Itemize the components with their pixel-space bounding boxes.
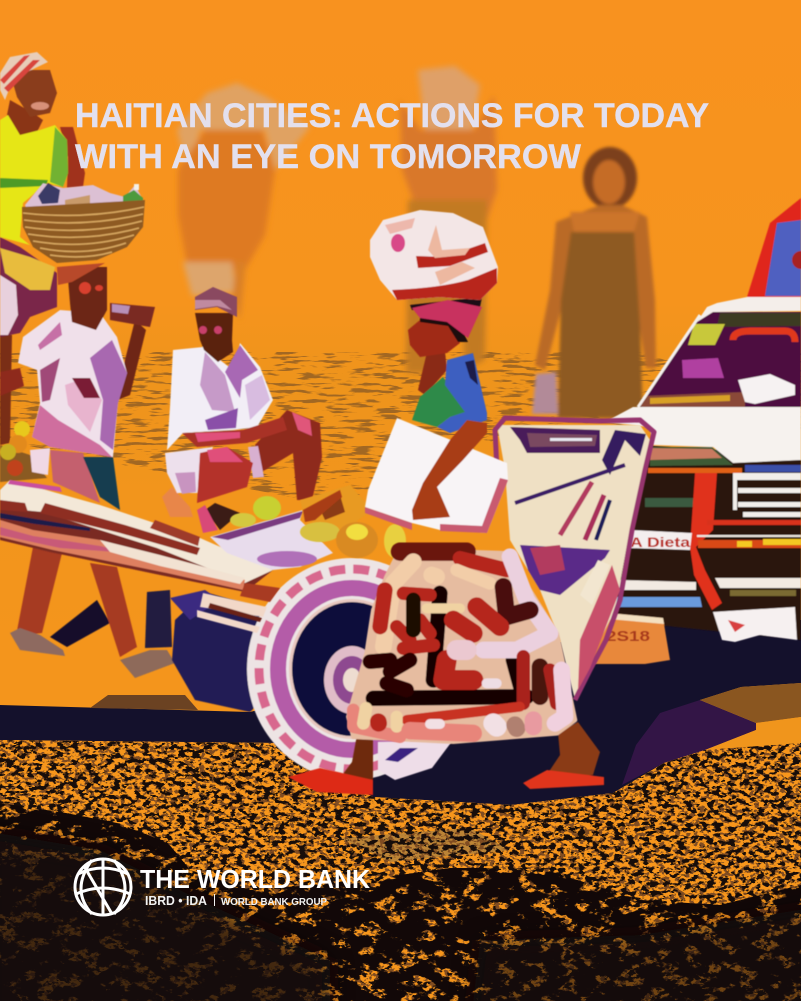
dark hair xyxy=(420,316,468,342)
lower bumper white right xyxy=(715,578,801,588)
man near thigh xyxy=(197,447,253,503)
man foot xyxy=(197,505,218,533)
upper plank xyxy=(0,480,273,583)
cloth on cart xyxy=(210,510,333,570)
title xyxy=(75,97,709,176)
car: 2S18 xyxy=(606,628,650,645)
head cloth xyxy=(57,263,105,285)
right leg xyxy=(90,563,137,657)
car top corner: red xyxy=(747,198,801,297)
pushcart frame xyxy=(495,418,654,700)
left leg xyxy=(16,547,62,636)
basket with goods xyxy=(22,183,145,263)
blue strip xyxy=(745,465,801,472)
right sandal xyxy=(120,650,175,678)
cast shadow on the ground xyxy=(50,600,110,647)
raised arm xyxy=(118,320,146,400)
man forearm xyxy=(182,417,287,447)
ghost figure: left xyxy=(177,83,310,320)
shirt xyxy=(18,310,127,457)
yellow bag xyxy=(0,248,55,290)
text band on bumper xyxy=(628,530,692,550)
short plank one xyxy=(200,593,267,617)
texture: city blocks xyxy=(0,740,801,1001)
texture: dark hillside xyxy=(0,803,801,1001)
frame cream stripes right xyxy=(580,560,610,605)
goods on the basket xyxy=(25,183,143,212)
neck and head xyxy=(67,267,107,330)
dark hill lower left xyxy=(0,830,330,1001)
other hand xyxy=(303,490,342,522)
torso: green xyxy=(412,377,467,427)
rear sandal xyxy=(523,770,604,789)
cart planks xyxy=(0,480,333,633)
frame pink outline xyxy=(495,418,654,700)
short plank two xyxy=(197,610,260,633)
sub-line: World Bank Group: WORLD BANK GROUP xyxy=(221,897,327,908)
green-orange bar xyxy=(730,590,796,596)
car roof xyxy=(697,297,801,322)
figure: woman carrying basket xyxy=(0,263,175,678)
right woman chest xyxy=(570,212,640,240)
windscreen magenta blob xyxy=(682,358,724,378)
fruit pile xyxy=(0,445,47,482)
right woman face xyxy=(593,160,625,204)
front leg xyxy=(340,735,373,785)
fruit on the cart xyxy=(230,485,406,558)
left woman headwrap xyxy=(0,52,48,100)
white bag at waist xyxy=(30,448,50,475)
right woman dress xyxy=(558,232,643,418)
dark hill lower right xyxy=(470,905,801,1001)
left woman neck xyxy=(7,100,43,140)
left woman arm xyxy=(60,127,85,188)
windscreen red arc xyxy=(733,331,795,342)
man shorts xyxy=(165,447,213,493)
car top corner: red dot xyxy=(792,251,801,269)
ghost figure: right woman xyxy=(532,147,656,418)
green grille slat xyxy=(645,498,695,507)
panel: aerial city photo xyxy=(0,740,801,1001)
windscreen top band xyxy=(717,313,801,327)
dark inner wheel xyxy=(172,592,268,712)
face xyxy=(408,320,460,357)
windscreen bottom band xyxy=(641,392,745,407)
white package xyxy=(365,418,508,533)
left woman top xyxy=(0,115,68,245)
World Bank logo xyxy=(75,859,371,915)
car top corner: blue xyxy=(765,220,801,296)
text band on bumper: A Dieta xyxy=(630,534,690,550)
figure: woman top left xyxy=(0,52,85,445)
man shoe xyxy=(162,487,193,517)
pink hat xyxy=(412,300,482,338)
orange ground patch right xyxy=(705,717,801,750)
car xyxy=(590,198,801,664)
icon: globe xyxy=(75,859,131,915)
left woman face xyxy=(13,70,57,117)
blue bar xyxy=(614,597,702,607)
dark band under bundle xyxy=(410,297,482,310)
windscreen xyxy=(640,312,801,408)
front sandal xyxy=(288,768,373,795)
bottle xyxy=(110,303,155,327)
frame diagonal dark line xyxy=(515,465,625,503)
white thin bar xyxy=(697,535,801,537)
red frame xyxy=(690,473,722,610)
package pink edge xyxy=(365,478,508,533)
man foot shadow xyxy=(205,503,240,530)
ghost figure: centre xyxy=(400,66,497,373)
right woman shoulders and arms xyxy=(535,205,656,370)
car hood xyxy=(605,407,801,463)
torso: blue xyxy=(437,353,487,433)
frame corner xyxy=(602,430,646,475)
plank backing xyxy=(0,480,273,592)
green strip xyxy=(650,447,733,466)
figure: squatting man xyxy=(162,287,322,533)
white grille xyxy=(733,473,801,517)
hazy ground texture xyxy=(0,352,801,498)
shadow: purple patch xyxy=(622,700,756,785)
lower bumper white left xyxy=(618,580,696,590)
arm over package xyxy=(412,420,487,520)
man cap xyxy=(195,287,237,317)
man far leg xyxy=(255,410,322,500)
left woman hand xyxy=(0,368,24,396)
ghost figures in the background xyxy=(177,66,656,418)
cart wheel xyxy=(170,558,457,780)
tyre xyxy=(247,558,457,780)
grille dark area xyxy=(610,445,801,640)
frame cream body xyxy=(497,425,650,700)
right woman hair xyxy=(583,147,637,209)
windscreen edge xyxy=(638,315,700,407)
lower plank xyxy=(0,520,245,590)
dark shadow on the ground xyxy=(0,620,801,805)
plaza xyxy=(340,828,510,862)
frame top opening xyxy=(510,427,600,453)
texture: brown grain xyxy=(0,740,801,1001)
neck xyxy=(418,352,447,395)
frame pink diagonals xyxy=(560,482,592,535)
ground speckle right xyxy=(700,683,801,723)
pink wrap xyxy=(50,450,100,503)
man face xyxy=(195,313,233,362)
ground speckle under cart xyxy=(90,695,198,710)
figure: central woman xyxy=(288,210,604,795)
number plate xyxy=(590,612,670,664)
plaza block xyxy=(535,825,600,852)
sub-line: IBRD IDA: IBRD • IDA xyxy=(145,893,208,908)
white cloth on dash xyxy=(738,374,795,404)
frame lower purple xyxy=(520,545,610,595)
rear leg xyxy=(525,722,600,783)
man shirt xyxy=(167,343,273,450)
skirt xyxy=(348,550,575,742)
left woman skirt xyxy=(0,237,57,337)
head bundle xyxy=(370,210,498,300)
torso: dark fold xyxy=(465,360,478,385)
hanging decoration xyxy=(713,607,797,642)
right woman bag xyxy=(532,372,558,414)
title: HAITIAN CITIES: ACTIONS FOR TODAY xyxy=(75,97,709,135)
red bar xyxy=(707,520,801,525)
basket body xyxy=(22,200,145,263)
orange strip xyxy=(648,468,742,473)
title: WITH AN EYE ON TOMORROW xyxy=(75,138,582,176)
tyre lower part xyxy=(378,740,453,780)
left sandal xyxy=(10,628,65,656)
teal wrap xyxy=(83,457,120,510)
red block xyxy=(240,583,280,602)
wordmark: THE WORLD BANK xyxy=(140,866,371,894)
orange bumper bar xyxy=(698,540,801,548)
divider xyxy=(214,894,215,906)
left woman leg xyxy=(0,335,12,445)
